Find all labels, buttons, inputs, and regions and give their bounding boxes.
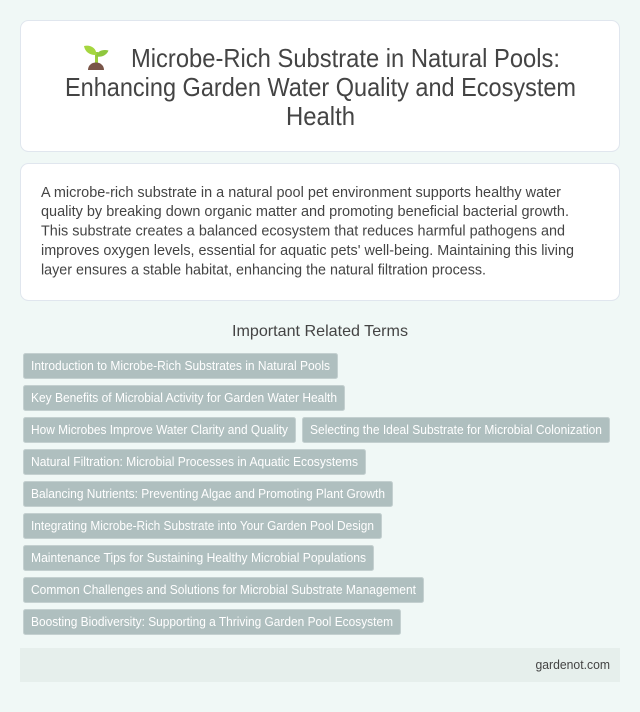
footer <box>20 648 620 682</box>
tag: natural filtration: Natural Filtration: Microbial Processes in Aquatic Ecosystems <box>31 455 358 469</box>
footer: gardenot.com <box>536 658 610 672</box>
text block: description paragraph: layer ensures a stable habitat, enhancing the natural filtration process. <box>41 262 486 278</box>
text block: description paragraph: This substrate creates a balanced ecosystem that reduces harmful pathogens and <box>41 222 565 240</box>
icon: seedling <box>84 46 108 70</box>
title: Health <box>286 101 355 131</box>
panel: description <box>20 164 620 300</box>
tag: key benefits: Key Benefits of Microbial Activity for Garden Water Health <box>31 391 337 405</box>
tag: biodiversity <box>24 610 400 634</box>
tag: maintenance tips <box>24 546 374 570</box>
tag list: related terms <box>24 354 610 634</box>
heading: related terms: Important Related Terms <box>232 323 408 340</box>
text block: description paragraph: improves oxygen levels, essential for aquatic pets' well-being. Maintaining this living <box>41 242 574 259</box>
tag: key benefits <box>24 386 344 410</box>
tag: introduction: Introduction to Microbe-Rich Substrates in Natural Pools <box>31 359 330 373</box>
title <box>65 43 576 131</box>
tag: integrating substrate: Integrating Microbe-Rich Substrate into Your Garden Pool Design <box>31 519 374 533</box>
tag: selecting substrate <box>302 418 610 442</box>
tag: selecting substrate: Selecting the Ideal Substrate for Microbial Colonization <box>310 423 602 437</box>
tag: balancing nutrients: Balancing Nutrients: Preventing Algae and Promoting Plant Growth <box>31 487 385 501</box>
tag: common challenges <box>24 578 424 602</box>
tag: balancing nutrients <box>24 482 392 506</box>
text block: description paragraph: A microbe-rich substrate in a natural pool pet environment supports healthy water <box>41 184 561 201</box>
tag: integrating substrate <box>24 514 382 538</box>
text block: description paragraph <box>41 184 574 278</box>
title: Microbe-Rich Substrate in Natural Pools: <box>131 43 560 73</box>
tag: common challenges: Common Challenges and Solutions for Microbial Substrate Management <box>31 583 417 597</box>
tag: water clarity <box>24 418 296 442</box>
title: Enhancing Garden Water Quality and Ecosystem <box>65 72 576 102</box>
tag: natural filtration <box>24 450 366 474</box>
tag: maintenance tips: Maintenance Tips for Sustaining Healthy Microbial Populations <box>31 551 366 565</box>
panel: header card <box>20 20 620 152</box>
tag: introduction <box>24 354 338 378</box>
text block: description paragraph: quality by breaking down organic matter and promoting beneficial bacterial growth. <box>41 203 569 220</box>
tag: water clarity: How Microbes Improve Water Clarity and Quality <box>31 423 289 437</box>
tag: biodiversity: Boosting Biodiversity: Supporting a Thriving Garden Pool Ecosystem <box>31 615 393 629</box>
